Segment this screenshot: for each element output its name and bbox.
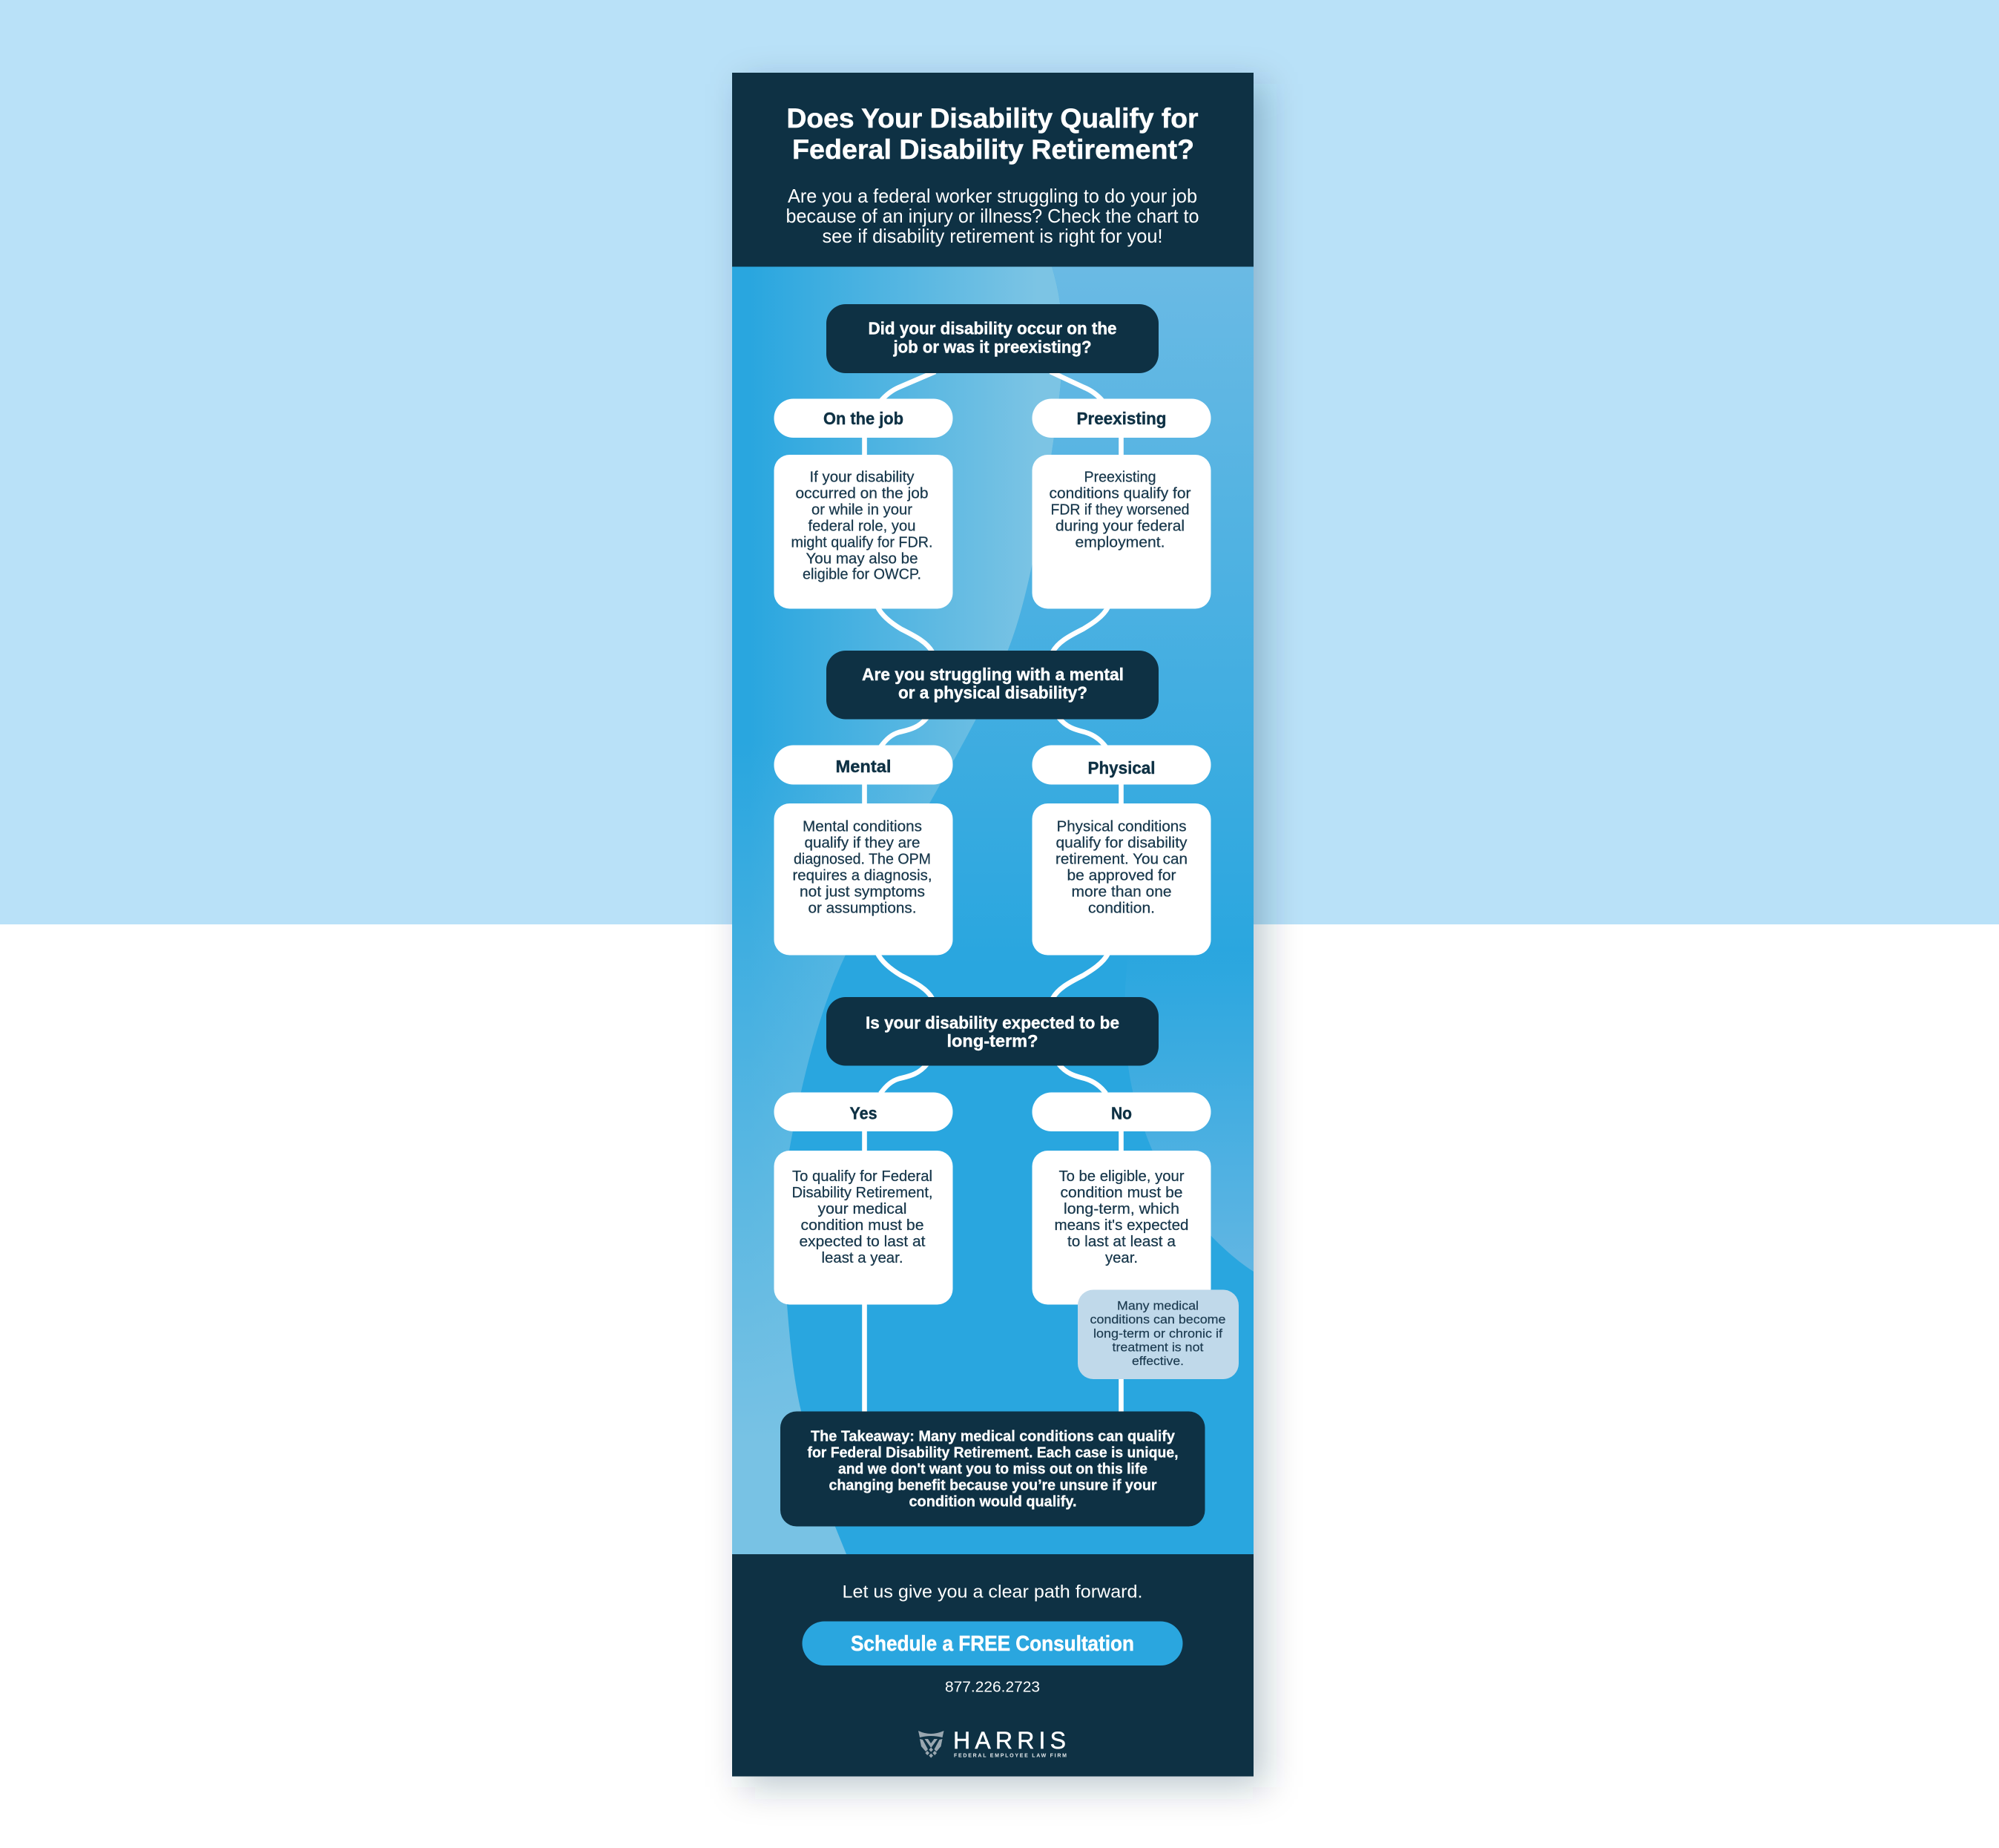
header panel xyxy=(732,73,1254,267)
box: mental detail xyxy=(774,803,952,956)
box: mental detail: or assumptions. xyxy=(809,899,917,917)
box: physical detail: more than one xyxy=(1071,883,1172,901)
box: mental detail: Mental conditions xyxy=(803,818,922,835)
box: preexisting detail: FDR if they worsened xyxy=(1050,502,1190,518)
question 3: long-term? xyxy=(946,1031,1038,1050)
box: mental detail: qualify if they are xyxy=(804,834,920,852)
background: light blue band xyxy=(0,0,1999,924)
question 1: Did your disability occur on the xyxy=(868,319,1117,338)
call to action line: Let us give you a clear path forward. xyxy=(843,1582,1142,1602)
box: no detail: To be eligible, your xyxy=(1059,1168,1185,1185)
box: yes detail: expected to last at xyxy=(800,1233,926,1250)
box: on the job detail: If your disability xyxy=(810,469,915,485)
question 1 xyxy=(826,304,1159,373)
title: Federal Disability Retirement? xyxy=(792,134,1194,165)
pill: Physical: Physical xyxy=(1087,758,1156,777)
box: physical detail: Physical conditions xyxy=(1056,818,1187,835)
box: physical detail: qualify for disability xyxy=(1056,834,1188,852)
intro text: see if disability retirement is right for you! xyxy=(822,225,1163,247)
box: yes detail: least a year. xyxy=(822,1249,903,1266)
title: Does Your Disability Qualify for xyxy=(786,103,1199,134)
question 1: job or was it preexisting? xyxy=(893,337,1092,356)
panel: flowchart background xyxy=(732,266,1254,1554)
takeaway box: and we don't want you to miss out on this life xyxy=(838,1460,1147,1478)
box: preexisting detail: conditions qualify for xyxy=(1049,485,1191,502)
pill: No xyxy=(1033,1092,1211,1131)
box: on the job detail: might qualify for FDR. xyxy=(791,534,933,550)
pill: Yes xyxy=(774,1092,952,1131)
callout: chronic conditions note: long-term or chronic if xyxy=(1093,1326,1222,1341)
box: yes detail: Disability Retirement, xyxy=(792,1184,933,1201)
box: no detail: year. xyxy=(1105,1249,1138,1266)
callout: chronic conditions note: treatment is not xyxy=(1113,1340,1204,1355)
intro text: because of an injury or illness? Check the chart to xyxy=(786,205,1199,227)
logo: Harris Federal Employee Law Firm: HARRIS xyxy=(953,1727,1066,1754)
box: preexisting detail xyxy=(1033,455,1211,608)
question 2: Are you struggling with a mental xyxy=(862,665,1124,684)
pill: Yes: Yes xyxy=(850,1104,877,1123)
button: schedule consultation: Schedule a FREE Consultation xyxy=(851,1632,1134,1656)
logo: Harris Federal Employee Law Firm xyxy=(918,1727,1067,1758)
connectors: white flow lines xyxy=(865,372,1122,1413)
pill: On the job xyxy=(774,399,952,438)
callout: chronic conditions note: Many medical xyxy=(1117,1298,1199,1313)
box: mental detail: not just symptoms xyxy=(800,883,925,901)
box: yes detail: condition must be xyxy=(801,1217,924,1234)
box: on the job detail xyxy=(774,455,952,608)
pill: On the job: On the job xyxy=(823,409,903,428)
intro text xyxy=(786,185,1199,247)
pill: No: No xyxy=(1111,1104,1132,1123)
phone number: 877.226.2723 xyxy=(945,1680,1040,1696)
box: physical detail: retirement. You can xyxy=(1056,850,1188,868)
question 2: or a physical disability? xyxy=(898,683,1087,702)
box: no detail xyxy=(1033,1151,1211,1304)
title xyxy=(786,103,1199,165)
box: on the job detail: or while in your xyxy=(811,502,912,518)
box: on the job detail: eligible for OWCP. xyxy=(803,565,921,583)
box: mental detail: diagnosed. The OPM xyxy=(794,850,931,868)
question 2 xyxy=(826,651,1159,720)
intro text: Are you a federal worker struggling to do your job xyxy=(788,185,1197,207)
pill: Preexisting: Preexisting xyxy=(1077,409,1166,428)
button: schedule consultation xyxy=(803,1622,1182,1665)
box: on the job detail: occurred on the job xyxy=(795,485,929,502)
callout: chronic conditions note: effective. xyxy=(1132,1354,1184,1368)
icon: shield xyxy=(918,1731,943,1758)
pill: Physical xyxy=(1033,745,1211,785)
box: on the job detail: federal role, you xyxy=(809,518,915,534)
box: physical detail xyxy=(1033,803,1211,956)
box: preexisting detail: employment. xyxy=(1076,534,1165,550)
box: preexisting detail: during your federal xyxy=(1056,518,1185,534)
box: physical detail: be approved for xyxy=(1067,867,1176,884)
box: yes detail: your medical xyxy=(817,1200,906,1217)
pill: Preexisting xyxy=(1033,399,1211,438)
takeaway box: for Federal Disability Retirement. Each case is unique, xyxy=(807,1444,1178,1461)
takeaway box: changing benefit because you’re unsure if your xyxy=(829,1476,1157,1494)
takeaway box: The Takeaway: Many medical conditions can qualify xyxy=(811,1427,1176,1445)
logo: Harris Federal Employee Law Firm: FEDERAL EMPLOYEE LAW FIRM xyxy=(954,1754,1067,1758)
box: preexisting detail: Preexisting xyxy=(1084,469,1156,485)
box: yes detail xyxy=(774,1151,952,1304)
box: no detail: to last at least a xyxy=(1067,1233,1176,1250)
callout: chronic conditions note xyxy=(1078,1289,1239,1379)
box: no detail: long-term, which xyxy=(1064,1200,1179,1217)
footer panel xyxy=(732,1554,1254,1776)
box: physical detail: condition. xyxy=(1088,899,1155,917)
pill: Mental xyxy=(774,745,952,785)
takeaway box: condition would qualify. xyxy=(909,1493,1077,1510)
panel drop shadow xyxy=(743,84,1265,1787)
question 3 xyxy=(826,997,1159,1065)
box: no detail: condition must be xyxy=(1061,1184,1182,1201)
box: mental detail: requires a diagnosis, xyxy=(792,867,932,884)
box: no detail: means it's expected xyxy=(1055,1217,1188,1234)
takeaway box xyxy=(780,1411,1205,1527)
box: on the job detail: You may also be xyxy=(806,550,918,567)
callout: chronic conditions note: conditions can become xyxy=(1090,1312,1225,1326)
pill: Mental: Mental xyxy=(835,757,892,776)
question 3: Is your disability expected to be xyxy=(866,1013,1119,1033)
box: yes detail: To qualify for Federal xyxy=(792,1168,932,1185)
